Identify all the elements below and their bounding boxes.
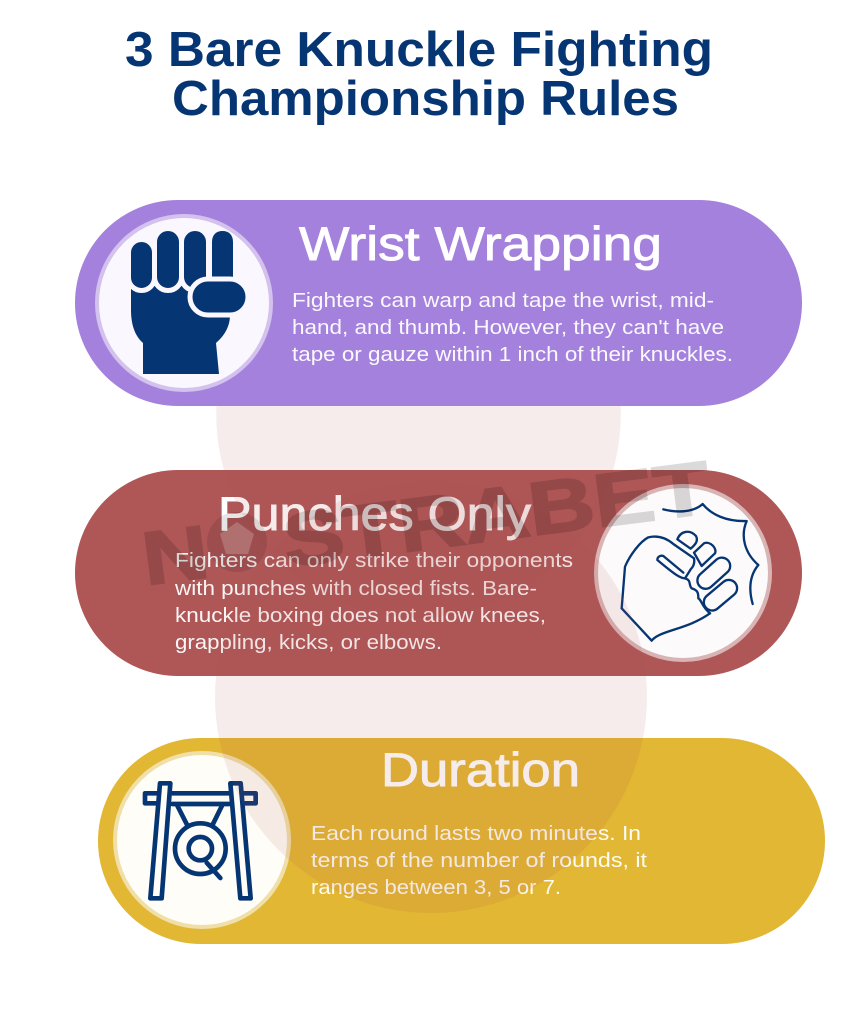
text block bbox=[292, 290, 733, 366]
text block: with punches with closed fists. Bare- bbox=[174, 578, 537, 600]
text block: Each round lasts two minutes. In bbox=[311, 823, 641, 845]
title: 3 Bare Knuckle Fighting bbox=[125, 23, 713, 77]
background circle: lower bbox=[215, 481, 647, 913]
text block: knuckle boxing does not allow knees, bbox=[175, 605, 546, 627]
panel: duration bbox=[98, 738, 825, 944]
background circle: upper bbox=[216, 406, 621, 618]
panel: punches only bbox=[75, 470, 802, 676]
icon: watermark ball bbox=[207, 512, 267, 572]
title: Championship Rules bbox=[172, 72, 679, 126]
heading: Duration bbox=[381, 743, 580, 796]
panel: wrist wrapping bbox=[75, 200, 802, 406]
text block: Fighters can warp and tape the wrist, mid- bbox=[292, 290, 714, 312]
text block: tape or gauze within 1 inch of their knuckles. bbox=[292, 344, 733, 366]
icon: solid raised fist bbox=[97, 216, 271, 390]
text block: terms of the number of rounds, it bbox=[311, 850, 648, 872]
text block: grappling, kicks, or elbows. bbox=[175, 632, 442, 654]
title bbox=[125, 23, 713, 126]
icon: gong on stand bbox=[115, 753, 289, 927]
watermark: N bbox=[137, 509, 213, 601]
watermark bbox=[137, 445, 714, 601]
heading: Punches Only bbox=[218, 487, 532, 540]
icon: outlined fist impact bbox=[596, 486, 770, 660]
text block: ranges between 3, 5 or 7. bbox=[311, 877, 561, 899]
watermark: STRABET bbox=[278, 445, 714, 583]
text block: hand, and thumb. However, they can't have bbox=[292, 317, 724, 339]
text block bbox=[174, 550, 573, 654]
text block bbox=[311, 823, 648, 899]
text block: Fighters can only strike their opponents bbox=[175, 550, 573, 572]
heading: Wrist Wrapping bbox=[299, 217, 662, 270]
